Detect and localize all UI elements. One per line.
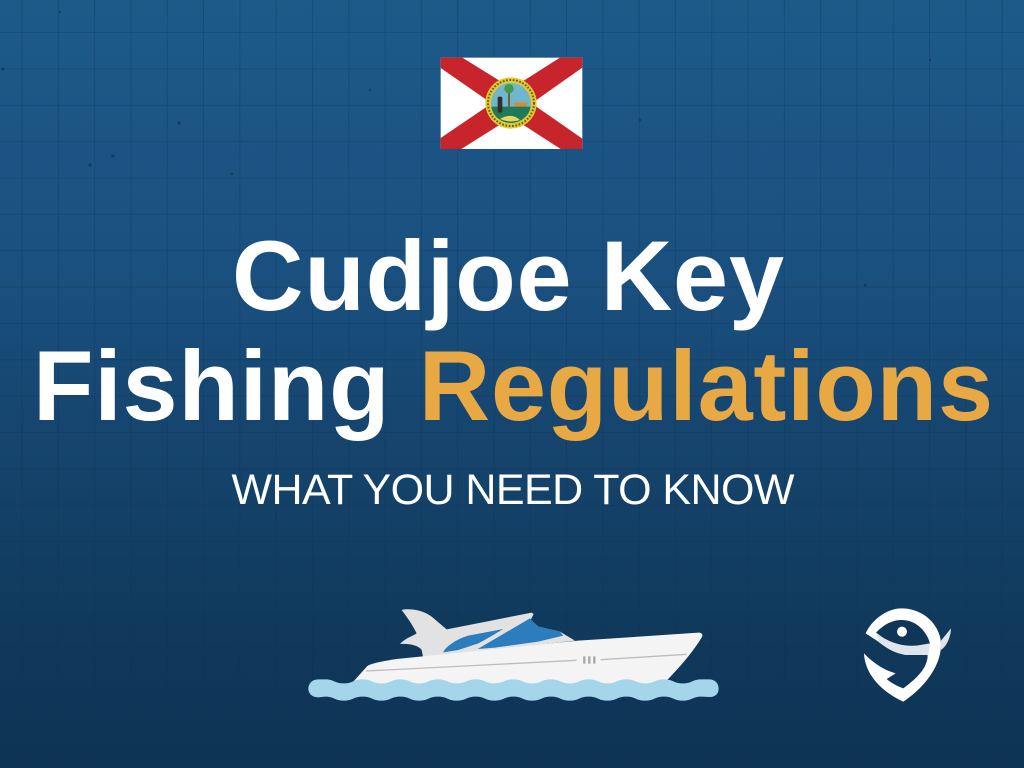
flag of Florida xyxy=(441,58,582,149)
title line 2: Fishing Regulations xyxy=(33,330,993,441)
boat hull xyxy=(353,633,702,690)
logo head opening xyxy=(876,620,930,646)
icon: boat on water xyxy=(308,609,719,701)
logo band xyxy=(877,633,930,655)
title xyxy=(33,220,993,441)
boat windows xyxy=(443,618,563,652)
logo eye xyxy=(897,627,907,637)
water waves xyxy=(308,679,719,701)
boat cabin xyxy=(400,609,575,658)
subtitle: WHAT YOU NEED TO KNOW xyxy=(232,466,795,514)
logo body xyxy=(864,608,941,702)
hull stripe xyxy=(366,654,687,671)
logo tail xyxy=(941,628,951,650)
logo: fish hook xyxy=(864,608,951,702)
title line 1: Cudjoe Key xyxy=(232,220,784,331)
hull vents xyxy=(584,656,594,664)
